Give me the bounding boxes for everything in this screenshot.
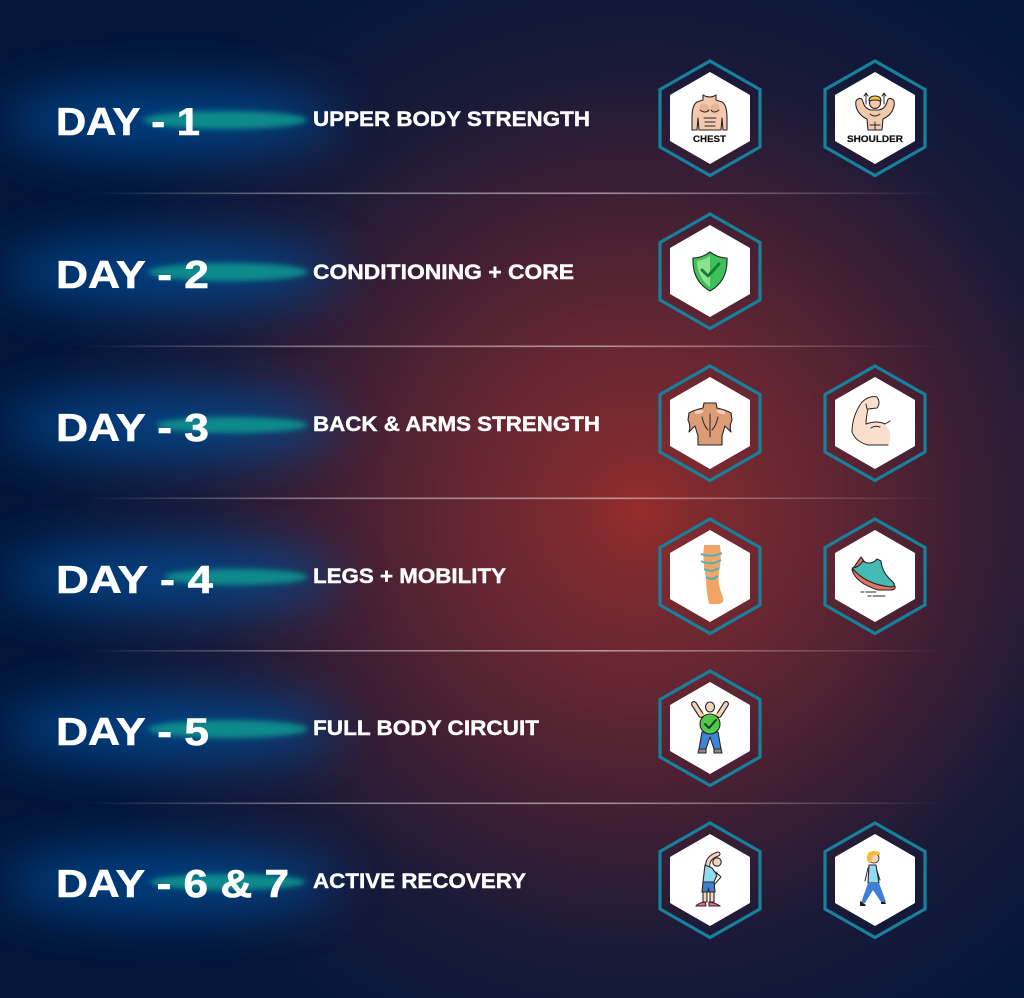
glow: day 3 [0,393,340,457]
row 6: Day 6 and 7 active recovery [0,823,925,938]
icon badge: leg [660,519,760,634]
glow: day 5 [0,697,340,761]
day label: day 2: DAY - 2 [56,254,209,297]
workout title: legs + mobility: LEGS + MOBILITY [313,565,506,588]
icon badge: flexed arm [825,366,925,480]
icon badge: back [660,366,760,480]
workout title: back and arms strength: BACK & ARMS STRENGTH [313,413,600,436]
day label: day 5: DAY - 5 [56,711,209,754]
glow: day 1 [0,88,340,152]
icon badge: shoulder [825,61,925,176]
tag: shoulder: SHOULDER [847,134,904,144]
divider 2 [85,346,945,347]
row 1: Day 1 upper body strength [0,61,925,176]
divider 1 [85,192,945,194]
divider 3 [85,498,945,499]
day label: day 4: DAY - 4 [56,559,213,602]
day label: day 6 and 7: DAY - 6 & 7 [56,863,289,906]
icon badge: full body check [660,671,760,786]
row 4: Day 4 legs and mobility [0,519,925,634]
workout title: active recovery: ACTIVE RECOVERY [313,870,526,893]
icon badge: shield [660,214,760,328]
glow: day 4 [0,545,340,609]
row 5: Day 5 full body circuit [0,671,760,786]
divider 5 [85,802,945,804]
tag: chest: CHEST [693,134,727,144]
glow: day 2 [0,240,340,304]
icon badge: running shoe [825,519,925,634]
glow: day 6 and 7 [0,850,340,914]
row 2: Day 2 conditioning and core [0,214,760,328]
icon badge: chest [660,61,760,176]
day label: day 3: DAY - 3 [56,407,209,450]
divider 4 [85,650,945,652]
workout title: conditioning + core: CONDITIONING + CORE [313,261,574,284]
day label: day 1: DAY - 1 [56,101,200,144]
icon badge: walking person [825,823,925,938]
workout title: full body circuit: FULL BODY CIRCUIT [313,717,539,740]
icon badge: stretching person [660,823,760,938]
row 3: Day 3 back and arms strength [0,366,925,480]
workout title: upper body strength: UPPER BODY STRENGTH [313,108,590,131]
